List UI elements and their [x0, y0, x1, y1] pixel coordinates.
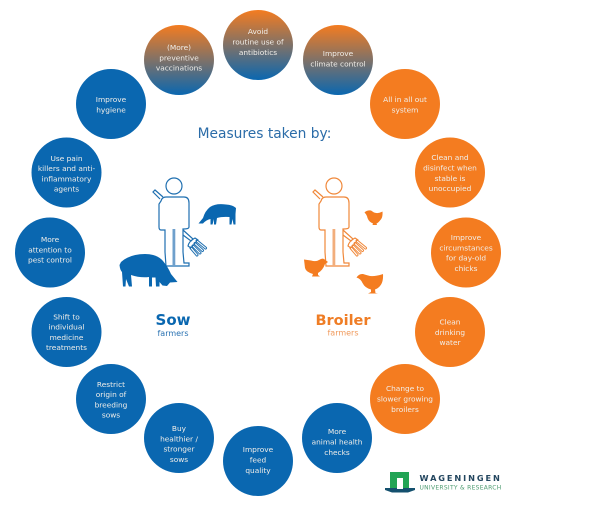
circle: breeding sows: [76, 364, 146, 434]
icon: right chicken: [356, 274, 383, 294]
circle: antibiotics: antibiotics: [239, 48, 277, 57]
circle: pain killers: agents: [54, 184, 79, 194]
circle: feed quality: [223, 426, 293, 496]
circle: day-old chicks: circumstances: [439, 244, 493, 252]
circle: healthier sows: Buy: [172, 424, 187, 433]
circle: breeding sows: breeding: [95, 400, 128, 410]
circle: slower growing: Change to: [386, 384, 425, 393]
circle: animal health checks: checks: [324, 448, 350, 457]
circle: antibiotics: Avoid: [248, 27, 268, 36]
circle: animal health checks: More: [328, 427, 347, 436]
circle: pain killers: [32, 138, 102, 208]
shared measures: [144, 10, 373, 95]
circle: feed quality: Improve: [243, 445, 274, 454]
circle: vaccinations: preventive: [159, 54, 199, 62]
icon: large pig: [120, 254, 178, 286]
circle: healthier sows: stronger: [163, 444, 196, 454]
icon: left chicken: [304, 259, 328, 276]
circle: climate control: Improve: [323, 49, 354, 58]
circle: antibiotics: [223, 10, 293, 80]
label: broiler farmers: farmers: [327, 328, 359, 338]
circle: slower growing: broilers: [391, 405, 419, 414]
circle: animal health checks: animal health: [312, 438, 363, 446]
circle: climate control: [303, 25, 373, 95]
label: sow farmers: farmers: [157, 329, 189, 338]
circle: pest control: [15, 218, 85, 288]
label: broiler farmers: [315, 313, 371, 338]
circle: breeding sows: sows: [102, 410, 120, 420]
circle: healthier sows: sows: [170, 455, 188, 464]
circle: pain killers: Use pain: [50, 154, 83, 163]
circle: healthier sows: [144, 403, 214, 473]
circle: hygiene: hygiene: [96, 106, 126, 114]
broiler farmer icon: [313, 178, 366, 266]
circle: feed quality: feed: [250, 456, 267, 464]
circle: vaccinations: (More): [167, 43, 191, 52]
circle: slower growing: slower growing: [377, 394, 433, 404]
circle: day-old chicks: [431, 218, 501, 288]
circle: drinking water: Clean: [440, 318, 461, 326]
circle: day-old chicks: for day-old: [446, 254, 486, 262]
circle: breeding sows: Restrict: [97, 380, 125, 389]
circle: clean and disinfect: [415, 138, 485, 208]
circle: antibiotics: routine use of: [232, 38, 284, 46]
circle: slower growing: [370, 364, 440, 434]
circle: individual treatments: Shift to: [53, 312, 80, 322]
circle: individual treatments: treatments: [46, 343, 87, 352]
circle: individual treatments: medicine: [50, 333, 84, 342]
circle: pest control: attention to: [28, 246, 72, 254]
circle: individual treatments: individual: [49, 322, 84, 332]
title: Measures taken by:: [198, 126, 331, 142]
circle: all in all out: system: [392, 106, 418, 114]
circle: vaccinations: vaccinations: [156, 64, 202, 72]
icon: small chicken: [364, 210, 383, 225]
circle: all in all out: [370, 69, 440, 139]
circle: pain killers: inflammatory: [42, 174, 92, 184]
label: sow farmers: Sow: [156, 311, 191, 329]
circle: individual treatments: [32, 297, 102, 367]
circle: drinking water: drinking: [435, 328, 465, 337]
logo: Wageningen University & Research: WAGENINGEN: [420, 473, 502, 483]
sow farmer icon: [153, 178, 206, 266]
sow farmer measures: [15, 69, 293, 496]
circle: hygiene: [76, 69, 146, 139]
circle: all in all out: All in all out: [383, 95, 427, 104]
logo: Wageningen University & Research: [385, 472, 502, 492]
circle: clean and disinfect: Clean and: [431, 153, 469, 162]
circle: clean and disinfect: unoccupied: [429, 184, 472, 193]
circle: drinking water: [415, 297, 485, 367]
circle: clean and disinfect: stable is: [435, 174, 466, 183]
circle: day-old chicks: Improve: [451, 233, 482, 242]
logo: Wageningen University & Research: UNIVERSITY & RESEARCH: [420, 484, 502, 492]
circle: feed quality: quality: [245, 466, 271, 475]
circle: climate control: climate control: [310, 60, 366, 68]
circle: clean and disinfect: disinfect when: [423, 164, 477, 172]
broiler farmer measures: [302, 69, 501, 473]
circle: vaccinations: [144, 25, 214, 95]
circle: pain killers: killers and anti-: [38, 164, 95, 173]
circle: pest control: More: [41, 235, 60, 244]
circle: healthier sows: healthier /: [160, 434, 198, 444]
circle: pest control: pest control: [28, 256, 72, 264]
circle: drinking water: water: [439, 338, 461, 347]
circle: animal health checks: [302, 403, 372, 473]
circle: day-old chicks: chicks: [454, 264, 478, 273]
label: broiler farmers: Broiler: [315, 313, 371, 329]
circle: breeding sows: origin of: [96, 390, 127, 399]
icon: small pig: [198, 204, 236, 224]
label: sow farmers: [156, 311, 191, 338]
circle: hygiene: Improve: [96, 95, 127, 104]
